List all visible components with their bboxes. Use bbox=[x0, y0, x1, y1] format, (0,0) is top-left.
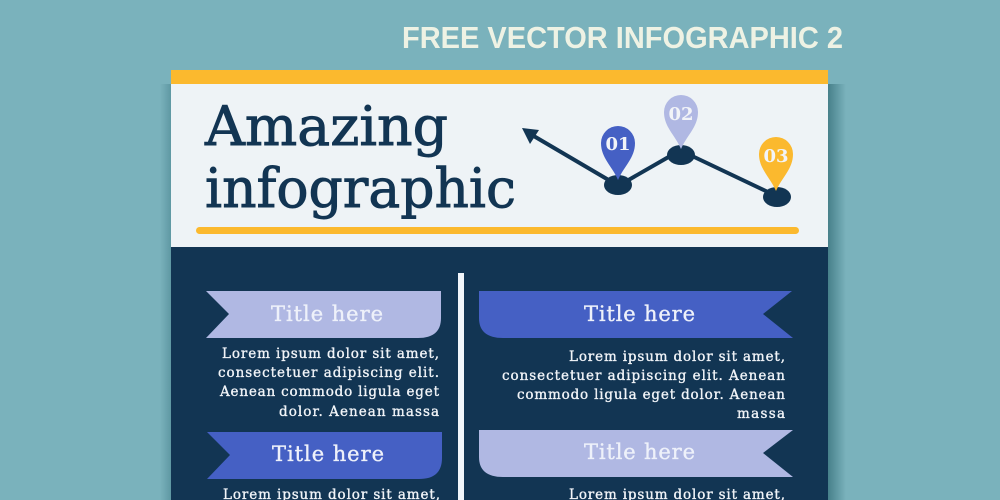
heading: Amazing bbox=[204, 95, 448, 158]
line chart with pins bbox=[522, 95, 793, 207]
body text: Aenean commodo ligula eget bbox=[219, 384, 440, 400]
trend line with arrow bbox=[522, 128, 770, 193]
right block 1 bbox=[479, 291, 793, 422]
ribbon bbox=[206, 291, 441, 338]
heading bbox=[204, 95, 516, 220]
right block 2: Title here bbox=[584, 440, 695, 464]
ribbon bbox=[207, 432, 442, 479]
body text: consectetuer adipiscing elit. bbox=[218, 365, 439, 381]
page title: FREE VECTOR INFOGRAPHIC 2 bbox=[402, 20, 843, 55]
pin 03: 03 bbox=[763, 146, 789, 167]
left block 1: Title here bbox=[271, 302, 383, 326]
body text: Lorem ipsum dolor sit amet, bbox=[222, 346, 439, 362]
body text: dolor. Aenean massa bbox=[279, 404, 439, 420]
body text bbox=[502, 349, 785, 422]
ribbon bbox=[479, 430, 793, 477]
body text bbox=[218, 346, 440, 420]
body text: commodo ligula eget dolor. Aenean bbox=[517, 387, 785, 403]
ribbon bbox=[479, 291, 793, 338]
centre divider bbox=[458, 273, 464, 500]
body text: massa bbox=[737, 406, 785, 422]
heading underline bbox=[196, 227, 799, 234]
chart nodes bbox=[604, 145, 791, 207]
right block 2 bbox=[479, 430, 793, 500]
heading: infographic bbox=[205, 157, 516, 220]
pin 02: 02 bbox=[668, 104, 694, 125]
body text: Lorem ipsum dolor sit amet, bbox=[569, 349, 785, 365]
pin 03 bbox=[759, 137, 793, 191]
pin 02 bbox=[664, 95, 698, 149]
poster header panel bbox=[171, 70, 828, 247]
pin 01: 01 bbox=[605, 134, 631, 155]
body text: consectetuer adipiscing elit. Aenean bbox=[502, 368, 785, 384]
right block 1: Title here bbox=[584, 302, 695, 326]
poster body panel bbox=[171, 247, 828, 500]
left block 1 bbox=[206, 291, 441, 420]
poster drop shadow bbox=[160, 84, 846, 500]
pin 01 bbox=[601, 126, 635, 180]
left block 2: Title here bbox=[272, 442, 384, 466]
left block 2 bbox=[207, 432, 442, 500]
